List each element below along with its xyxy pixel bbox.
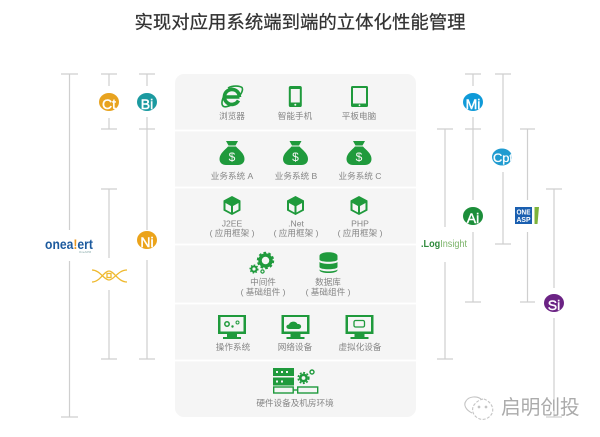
layer: application frameworks — [210, 196, 383, 238]
icon: browser — [222, 86, 242, 107]
right brackets — [437, 74, 562, 417]
tool: Mi badge: Mi — [466, 96, 480, 112]
icon: OS monitor — [218, 315, 246, 339]
tool: Ct badge: Ct — [102, 96, 116, 112]
watermark text: 启明创投 — [501, 397, 580, 419]
tool: Bi badge — [137, 93, 157, 112]
tool: ONE ASP logo: ONE — [516, 210, 531, 216]
icon: cube .Net — [287, 196, 304, 215]
central stack panel — [175, 74, 416, 417]
label: J2EE: ( 应用框架 ) — [210, 227, 255, 238]
label: tablet: 平板电脑 — [342, 110, 377, 121]
icon: database — [320, 252, 338, 273]
label: smartphone: 智能手机 — [278, 110, 313, 121]
tool: Ai badge: Ai — [467, 210, 479, 226]
tool: Ai badge — [463, 207, 483, 226]
tool: ONE ASP logo: ASP — [516, 217, 531, 224]
label: virtual: 虚拟化设备 — [339, 341, 382, 352]
label: middleware: ( 基础组件 ) — [241, 286, 286, 297]
label: database: ( 基础组件 ) — [306, 286, 351, 297]
layer: hardware — [256, 368, 334, 408]
layer: base components — [241, 252, 351, 297]
icon: cube J2EE — [224, 196, 240, 215]
tool: Ni badge — [137, 231, 157, 250]
label: database: 数据库 — [315, 276, 341, 287]
watermark — [465, 397, 580, 419]
icon: money bag B — [283, 141, 308, 165]
label: network: 网络设备 — [278, 341, 313, 352]
tool: Si badge — [544, 294, 564, 313]
label: J2EE: J2EE — [222, 218, 243, 228]
label: .Net: .Net — [288, 218, 304, 228]
label: middleware: 中间件 — [250, 276, 276, 287]
icon: money bag C: $ — [356, 150, 363, 164]
label: system A: 业务系统 A — [211, 170, 254, 181]
icon: money bag B: $ — [292, 150, 299, 164]
icon: network monitor — [282, 315, 310, 339]
title: 实现对应用系统端到端的立体化性能管理 — [134, 12, 466, 32]
tool: ONE ASP logo — [515, 207, 539, 224]
icon: cube PHP — [350, 196, 368, 215]
icon: tablet — [351, 86, 368, 107]
layer: client devices — [219, 86, 377, 121]
tool: Si badge: Si — [548, 297, 560, 313]
icon: money bag C — [346, 141, 372, 165]
label: hardware: 硬件设备及机房环境 — [256, 397, 334, 408]
tool: Ct badge — [99, 93, 119, 112]
label: PHP: PHP — [351, 218, 369, 228]
icon: money bag A: $ — [229, 150, 236, 164]
tool: onealert logo: onea!ert — [45, 236, 94, 252]
icon: virtual monitor — [346, 315, 374, 339]
label: OS: 操作系统 — [216, 341, 251, 352]
tool: Bi badge: Bi — [141, 96, 153, 112]
tool: Cpt badge: Cpt — [493, 151, 514, 165]
label: .Net: ( 应用框架 ) — [274, 227, 319, 238]
label: PHP: ( 应用框架 ) — [338, 227, 383, 238]
tool: eye icon — [92, 270, 127, 282]
tool: Mi badge — [463, 93, 483, 112]
layer: operating and virtual systems — [216, 315, 382, 352]
label: browser: 浏览器 — [219, 110, 245, 121]
icon: middleware gears — [250, 253, 273, 273]
tool: Ni badge: Ni — [140, 234, 154, 250]
label: system C: 业务系统 C — [339, 170, 381, 181]
label: system B: 业务系统 B — [275, 170, 318, 181]
icon: smartphone — [289, 86, 302, 107]
icon: chat bubbles — [465, 397, 493, 419]
icon: server hardware — [273, 368, 318, 393]
layer: business systems — [211, 141, 381, 181]
left brackets — [61, 74, 155, 417]
tool: LogInsight logo: .LogInsight — [421, 238, 467, 250]
tool: onealert logo: OneAPM — [79, 250, 92, 254]
icon: money bag A — [220, 141, 244, 165]
